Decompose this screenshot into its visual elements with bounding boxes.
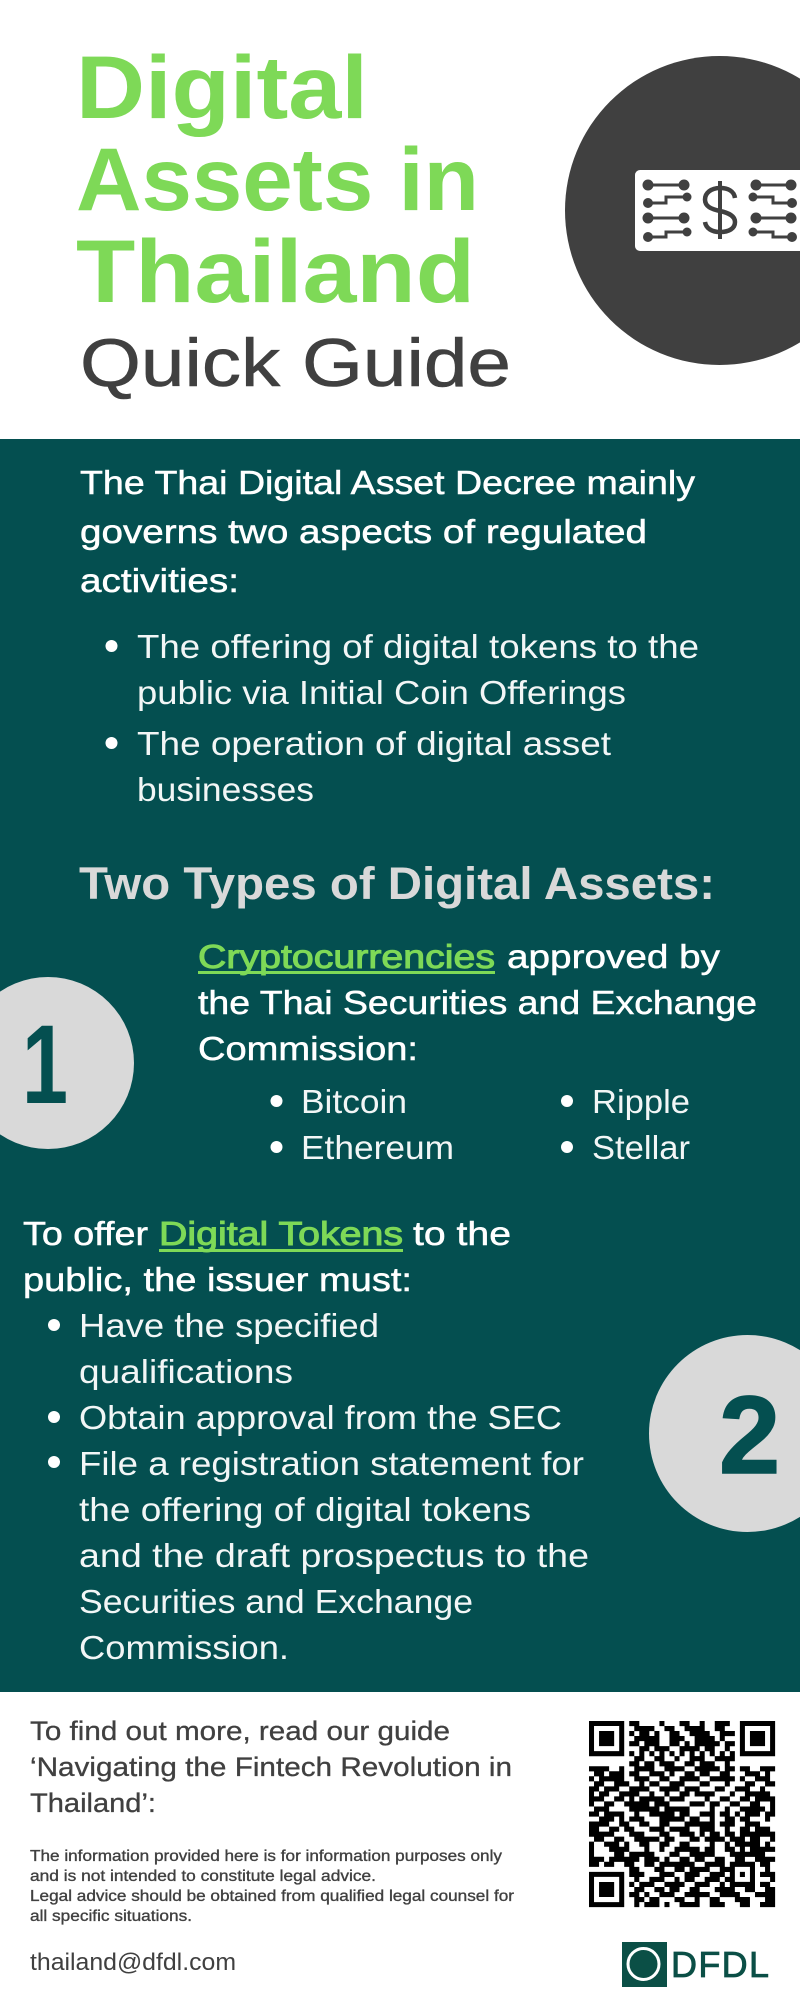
footer: read our guide text: Thailand’: [30,1788,156,1818]
subtitle: Quick Guide [80,325,511,401]
bullet list: issuer requirements: qualifications [79,1353,293,1390]
section 1: cryptocurrencies text: Cryptocurrencies [198,938,495,975]
bullet list: issuer requirements: and the draft prospectus to the [79,1537,589,1574]
footer: read our guide text: ‘Navigating the Fintech Revolution in [30,1752,512,1782]
section 2: digital tokens text: To offer [23,1215,148,1252]
section 1: cryptocurrencies text [198,938,757,1067]
title: Thailand [76,221,475,321]
intro text: governs two aspects of regulated [80,513,647,550]
contact email: thailand@dfdl.com [30,1949,236,1976]
panel: teal content band [0,439,800,1692]
bullet list: approved cryptocurrencies: Ripple [592,1083,690,1120]
bullet list: regulated activities: businesses [137,771,314,808]
bullet list: approved cryptocurrencies: Stellar [592,1129,690,1166]
bullet list: regulated activities [106,628,699,808]
number badge 2 [649,1335,800,1532]
DFDL logo [622,1942,769,1987]
intro text: The Thai Digital Asset Decree mainly [80,464,696,501]
bullet list: issuer requirements: Obtain approval from the SEC [79,1399,562,1436]
title: Assets in [76,129,479,229]
title [76,37,479,321]
bullet list: issuer requirements: Commission. [79,1629,289,1666]
intro text [80,464,696,599]
bullet list: issuer requirements: the offering of digital tokens [79,1491,531,1528]
footer: read our guide text: To find out more, read our guide [30,1716,450,1746]
section 2: digital tokens text: public, the issuer must: [23,1261,412,1298]
intro text: activities: [80,562,239,599]
title: Digital [76,37,368,137]
bullet list: approved cryptocurrencies: Ethereum [301,1129,454,1166]
bullet list: approved cryptocurrencies [270,1083,690,1166]
section 2: digital tokens text [23,1215,511,1298]
section 1: cryptocurrencies text: the Thai Securities and Exchange [198,984,757,1021]
disclaimer text: The information provided here is for information purposes only [30,1848,502,1865]
disclaimer text: all specific situations. [30,1908,192,1925]
number badge 1: 1 [22,1002,68,1127]
bullet list: regulated activities: The offering of digital tokens to the [137,628,699,665]
bullet list: approved cryptocurrencies: Bitcoin [301,1083,407,1120]
disclaimer text: and is not intended to constitute legal advice. [30,1868,376,1885]
bullet list: issuer requirements: File a registration statement for [79,1445,584,1482]
section 2: digital tokens text: to the [413,1215,511,1252]
bullet list: issuer requirements [48,1307,589,1666]
disclaimer text: Legal advice should be obtained from qualified legal counsel for [30,1888,514,1905]
section 1: cryptocurrencies text: approved by [507,938,721,975]
bullet list: regulated activities: public via Initial Coin Offerings [137,674,626,711]
number badge 2: 2 [719,1374,780,1497]
icon: digital dollar banknote in circle [565,56,800,365]
QR code [589,1724,775,1905]
section 1: cryptocurrencies text: Commission: [198,1030,418,1067]
disclaimer text [30,1848,514,1925]
bullet list: issuer requirements: Have the specified [79,1307,379,1344]
heading: two types of digital assets: Two Types of Digital Assets: [79,858,715,909]
footer: read our guide text [30,1716,512,1818]
number badge 1 [0,977,134,1149]
section 2: digital tokens text: Digital Tokens [159,1215,403,1252]
bullet list: issuer requirements: Securities and Exchange [79,1583,473,1620]
bullet list: regulated activities: The operation of digital asset [137,725,611,762]
DFDL logo: DFDL [671,1944,769,1985]
